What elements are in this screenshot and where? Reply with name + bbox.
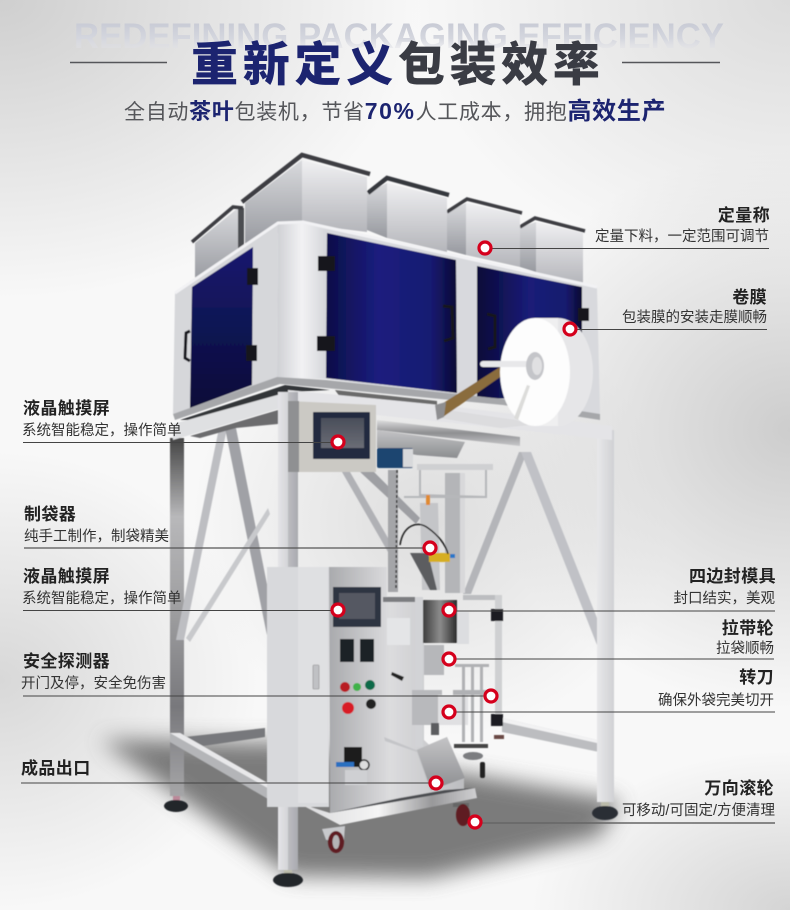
label: 转刀: 确保外袋完美切开: [658, 692, 774, 709]
label: 液晶触摸屏 top: 系统智能稳定，操作简单: [22, 422, 182, 439]
hinges and handles: [246, 256, 589, 361]
left diagonals: [176, 428, 420, 660]
hopper 2: [242, 155, 370, 245]
title: 重新定义包装效率: [191, 38, 605, 91]
screen: [313, 412, 370, 459]
label: 转刀: [449, 668, 775, 712]
label: 制袋器: 纯手工制作，制袋精美: [24, 528, 169, 545]
hopper 4: [447, 199, 522, 267]
shelf under housing: [173, 377, 600, 420]
label: 液晶触摸屏 lower: 液晶触摸屏: [23, 567, 110, 586]
label: 液晶触摸屏 top: 液晶触摸屏: [23, 399, 110, 418]
callout markers: [332, 242, 576, 828]
forming section: [383, 595, 504, 778]
label: 制袋器: [24, 505, 430, 548]
hinges on side: [491, 609, 503, 621]
label: 万向滚轮: 可移动/可固定/方便清理: [622, 802, 775, 819]
label: 成品出口: 成品出口: [21, 758, 91, 778]
label: 卷膜: 包装膜的安装走膜顺畅: [622, 309, 767, 326]
label: 制袋器: 制袋器: [24, 505, 76, 524]
machine: [164, 155, 618, 887]
label: 拉带轮: [449, 618, 774, 659]
floor shadow: [100, 740, 620, 878]
label: 安全探测器: 安全探测器: [23, 651, 110, 671]
film roll: [480, 318, 593, 426]
rear posts and former: [388, 464, 493, 593]
label: 液晶触摸屏 lower: 系统智能稳定，操作简单: [22, 590, 182, 607]
front left leg: [273, 392, 303, 887]
label: 万向滚轮: [475, 778, 775, 823]
label: 定量称: 定量下料，一定范围可调节: [595, 228, 769, 245]
control buttons: [340, 682, 350, 692]
base plate: [298, 788, 477, 825]
label: 卷膜: [570, 288, 767, 330]
upper frame table: [173, 390, 612, 440]
temperature meters: [340, 639, 354, 662]
door latch: [313, 665, 319, 689]
air filter unit: [344, 747, 353, 765]
hopper 1: [192, 207, 244, 282]
label: 卷膜: 卷膜: [732, 288, 767, 307]
scale housing: [173, 222, 600, 414]
blue door centre: [326, 233, 457, 393]
right leg and braces: [463, 430, 618, 820]
label: 安全探测器: [21, 651, 491, 696]
heading watermark: REDEFINING PACKAGING EFFICIENCY: [74, 17, 724, 56]
hopper 5: [520, 218, 585, 284]
label: 定量称: [485, 205, 770, 248]
subtitle: 全自动茶叶包装机，节省70%人工成本，拥抱高效生产: [124, 98, 666, 125]
casters: [322, 803, 470, 853]
discharge chute: [384, 737, 465, 790]
silver tube: [377, 410, 530, 458]
label: 安全探测器: 开门及停，安全免伤害: [21, 674, 166, 692]
label: 定量称: 定量称: [718, 205, 770, 225]
hopper 3: [367, 178, 449, 252]
label: 转刀: 转刀: [739, 668, 774, 687]
label: 拉带轮: 拉带轮: [722, 618, 774, 638]
switch: [391, 672, 404, 681]
label: 四边封模具: 四边封模具: [689, 567, 776, 586]
packing machine cabinet: [267, 567, 464, 815]
label: 四边封模具: 封口结实，美观: [674, 590, 775, 607]
blue door right: [477, 266, 582, 400]
label: 液晶触摸屏 lower: [22, 567, 338, 610]
touch screen control box: [288, 401, 376, 472]
label: 万向滚轮: 万向滚轮: [704, 778, 774, 798]
gear motor: [377, 448, 413, 468]
second screen: [333, 587, 381, 627]
label: 四边封模具: [449, 567, 776, 611]
cutter assembly: [453, 664, 489, 742]
back left leg: [164, 438, 188, 812]
film strip: [435, 367, 503, 420]
label: 液晶触摸屏 top: [22, 399, 338, 442]
blue door left: [190, 247, 253, 408]
lower left rails: [170, 728, 280, 806]
label: 拉带轮: 拉袋顺畅: [716, 640, 774, 657]
